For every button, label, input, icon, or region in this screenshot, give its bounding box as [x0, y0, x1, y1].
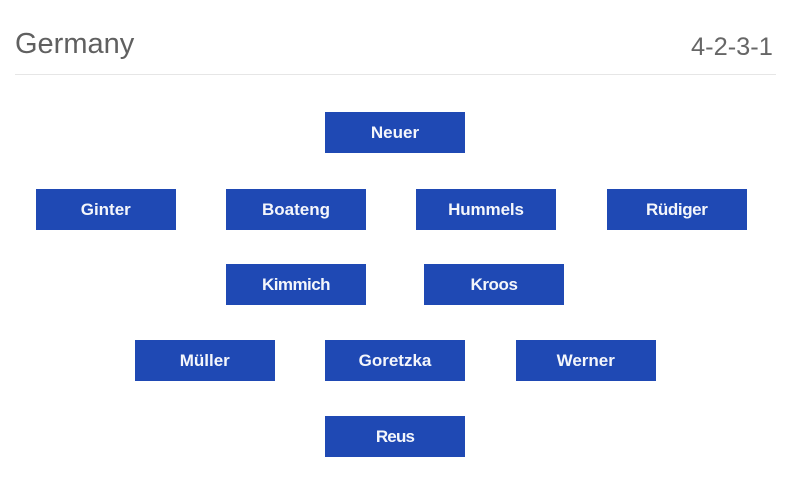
- defender: Boateng: [226, 189, 366, 230]
- defensive midfielder: Kimmich: Kimmich: [262, 275, 330, 294]
- attacking midfielder: Müller: [135, 340, 274, 380]
- defensive midfielder: Kroos: Kroos: [470, 275, 518, 294]
- defender: Hummels: Hummels: [448, 200, 524, 219]
- attacking midfielder: Goretzka: [325, 340, 465, 380]
- defensive midfielder: Kimmich: [226, 264, 366, 304]
- defender: Ginter: [36, 189, 176, 230]
- defensive midfielder: Kroos: [424, 264, 564, 304]
- title: team name: Germany: [15, 28, 134, 60]
- goalkeeper: Neuer: Neuer: [371, 123, 419, 142]
- formation label: 4-2-3-1: [691, 33, 773, 61]
- defender: Rüdiger: Rüdiger: [646, 200, 707, 219]
- attacking midfielder: Werner: [516, 340, 656, 380]
- defender: Rüdiger: [607, 189, 746, 230]
- defender: Boateng: Boateng: [262, 200, 330, 219]
- defender: Ginter: Ginter: [81, 200, 131, 219]
- striker: Reus: [325, 416, 465, 456]
- attacking midfielder: Werner: Werner: [557, 351, 615, 370]
- defender: Hummels: [416, 189, 556, 230]
- attacking midfielder: Müller: Müller: [180, 351, 230, 370]
- striker: Reus: Reus: [376, 427, 414, 446]
- attacking midfielder: Goretzka: Goretzka: [359, 351, 431, 370]
- goalkeeper: Neuer: [325, 112, 465, 152]
